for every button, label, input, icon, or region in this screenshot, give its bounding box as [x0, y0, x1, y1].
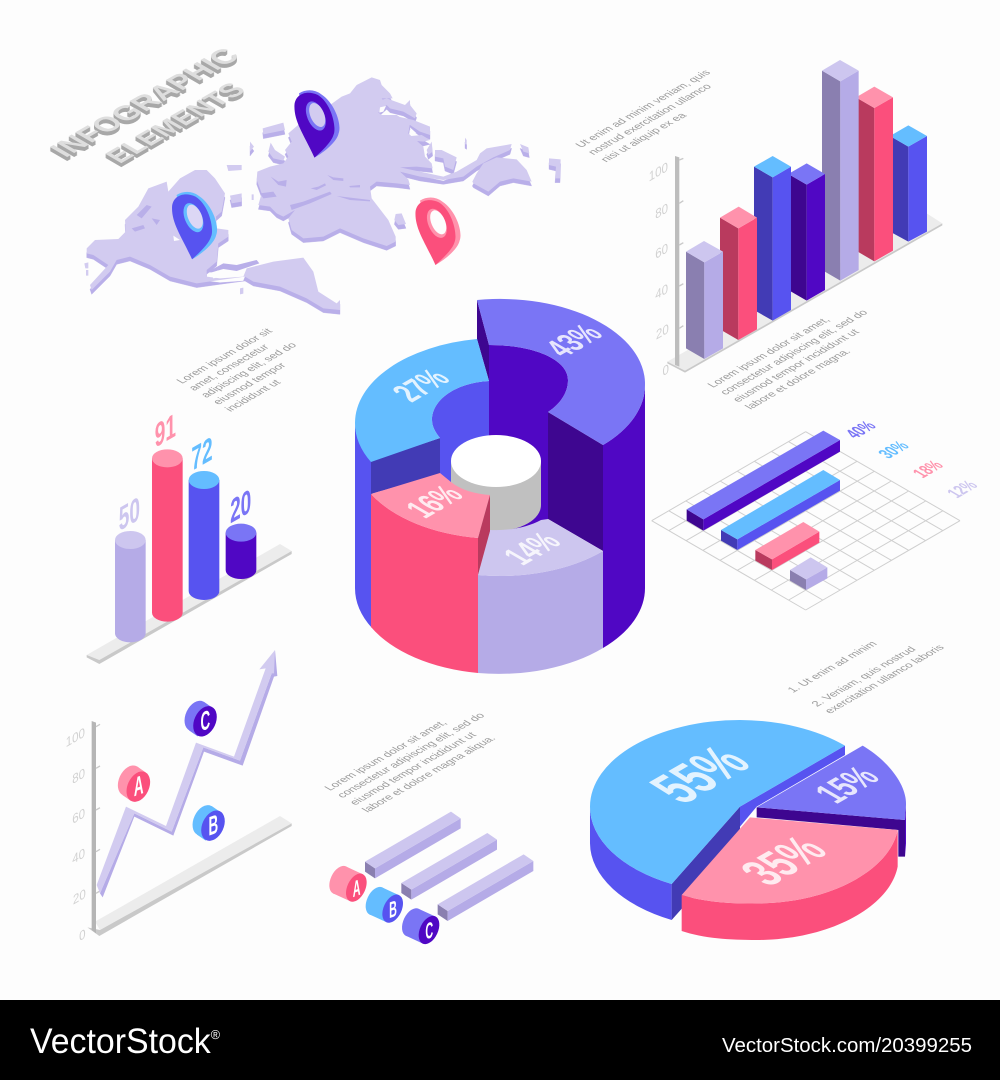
pin: red: [415, 198, 460, 265]
legend cylinder C: C: [425, 917, 433, 945]
lavender wall: [478, 551, 603, 674]
notch wedge: [477, 300, 489, 381]
label 30%: 30%: [874, 438, 914, 462]
text block: left: amet, consectetur: [186, 343, 273, 393]
blue segment top: [355, 339, 489, 462]
red segment top: [682, 817, 898, 903]
text block: top right: Ut enim ad minim veniam, quis: [573, 68, 714, 150]
inner wall dark: [548, 412, 603, 551]
chart floor: [667, 213, 942, 373]
red wall: [682, 830, 898, 940]
panel: line arrow chart: [66, 650, 533, 947]
y axis: [92, 721, 100, 933]
text block: under column chart: labore et dolore magna.: [743, 347, 854, 411]
title line 1: INFOGRAPHIC: [44, 44, 247, 162]
outer wall purple: [603, 385, 645, 648]
bar 12%: [790, 557, 827, 590]
center cylinder: [451, 435, 541, 531]
label 55%: 55%: [636, 738, 765, 812]
floor: [87, 816, 292, 936]
coastal gap: [379, 106, 417, 133]
y axis labels: [649, 159, 669, 379]
grid: [652, 432, 960, 610]
text block: under column chart: Lorem ipsum dolor sit amet,: [705, 316, 833, 390]
bar 2 red: [720, 207, 757, 340]
legend cylinder B: [362, 884, 407, 926]
bar 6 red: [856, 87, 893, 261]
y axis labels: 100: [649, 159, 668, 185]
text block: numbered list: 1. Ut enim ad minim: [785, 640, 880, 695]
bar 1 lavender: [686, 241, 723, 359]
bar 3 blue: [754, 156, 791, 321]
label 43%: 43%: [538, 320, 612, 362]
label 27%: 27%: [385, 364, 459, 407]
bar 40%: [687, 431, 840, 531]
cylinder 72: [189, 471, 219, 600]
text block: under column chart: consectetur adipiscing elit, sed do: [718, 308, 871, 397]
footer logo: VectorStock: [30, 1022, 217, 1061]
americas land: [84, 165, 340, 310]
caribbean strip: [132, 205, 259, 272]
arrow face: [97, 650, 275, 893]
floor: [87, 544, 292, 664]
lavender segment top: [478, 519, 603, 576]
text block: top right: nisi ut aliquip ex ea: [598, 111, 690, 164]
panel: world map: [84, 77, 561, 314]
y axis labels: 20: [73, 885, 86, 908]
bar 18%: [755, 522, 819, 570]
legend bar A: [365, 812, 461, 878]
Americas: [84, 165, 340, 314]
Eurasia, Africa and Oceania: [250, 77, 561, 250]
marker B: B: [208, 809, 218, 842]
bar 30%: [721, 470, 840, 550]
purple segment top: [757, 746, 906, 820]
y axis labels: 0: [79, 926, 86, 944]
cylinder 50: [115, 531, 146, 642]
map pins: [172, 90, 460, 265]
blue cut wall right: [740, 746, 845, 827]
dark wall under blue: [371, 438, 440, 494]
cylinder 91: [152, 449, 183, 622]
label 40%: 40%: [841, 418, 881, 442]
label 12%: 12%: [943, 478, 983, 501]
pin: blue: [172, 192, 217, 259]
y axis labels: 80: [72, 765, 85, 787]
text block: left: eiusmod tempor: [211, 361, 289, 407]
text block: lower middle: labore et dolore magna aliqua.: [360, 734, 499, 814]
arrow side: [100, 650, 277, 897]
panel: isometric column chart: [649, 60, 942, 379]
label 72: 72: [191, 428, 213, 478]
legend cylinder A: [325, 863, 371, 905]
y axis labels: 60: [72, 805, 85, 827]
panel: cylinder chart: [87, 405, 292, 664]
panel: grid bar chart: [652, 418, 983, 610]
pink segment top: [371, 473, 490, 538]
text block: numbered list: exercitation ullamco laboris: [822, 643, 948, 716]
text block: left: incididunt ut: [223, 378, 284, 414]
legend cylinder B: B: [389, 895, 397, 923]
americas extrusion: [87, 174, 340, 314]
y axis labels: 40: [655, 280, 668, 303]
y axis labels: [66, 724, 86, 944]
legend bar B: [401, 833, 497, 900]
label 14%: 14%: [496, 528, 570, 570]
eastern hemisphere extrusion: [250, 82, 561, 250]
y axis labels: 40: [72, 845, 85, 867]
inner wall blue: [432, 381, 489, 500]
bar 5 lavender: [822, 60, 859, 281]
panel: exploded pie chart: [590, 720, 906, 940]
pin: purple: [294, 90, 339, 158]
label 20: 20: [230, 481, 251, 531]
label 35%: 35%: [727, 828, 840, 893]
y axis: [675, 156, 683, 367]
y axis labels: 0: [662, 361, 669, 379]
purple segment top: [477, 299, 645, 445]
eastern hemisphere land: [250, 77, 561, 246]
marker C: [180, 697, 221, 740]
blue segment top: [590, 720, 845, 884]
outer wall blue: [355, 423, 372, 628]
blue wall: [590, 807, 672, 920]
marker B: [188, 801, 229, 845]
panel: donut chart: [355, 299, 645, 674]
bar 7 blue: [890, 125, 927, 242]
text block: lower middle: Lorem ipsum dolor sit amet,: [322, 719, 450, 793]
cylinder 20: [226, 524, 256, 579]
text block: under column chart: eiusmod tempor incididunt ut: [730, 328, 862, 404]
caribbean gap: [173, 236, 221, 278]
label 18%: 18%: [908, 458, 948, 481]
text block: lower middle: eiusmod tempor incididunt ut: [347, 731, 479, 807]
text block: top right: nostrud exercitation ullamco: [586, 82, 715, 157]
text block: lower middle: consectetur adipiscing elit, sed do: [335, 711, 488, 800]
bar 4 purple: [788, 163, 825, 301]
red wall: [371, 494, 478, 673]
footer band: [0, 1000, 1000, 1080]
title: infographic elements: [44, 44, 252, 168]
legend bar C: [438, 854, 533, 921]
y axis labels: 60: [655, 240, 668, 262]
footer url: VectorStock.com/20399255: [722, 1035, 972, 1057]
label 15%: 15%: [805, 761, 889, 809]
label 91: 91: [155, 405, 176, 455]
y axis labels: 80: [655, 200, 668, 222]
text block: left: adipiscing elit, sed do: [198, 341, 300, 400]
purple walls: [757, 805, 906, 857]
legend cylinder C: [398, 905, 443, 947]
inland seas: [260, 175, 370, 210]
marker C: C: [200, 704, 210, 738]
label 50: 50: [119, 488, 140, 538]
text block: numbered list: 2. Veniam, quis nostrud: [809, 645, 919, 709]
y axis labels: 100: [66, 724, 85, 750]
marker A: [113, 762, 155, 806]
footer logo: ®: [211, 1027, 220, 1042]
title line 2: ELEMENTS: [99, 78, 252, 167]
marker A: A: [134, 769, 144, 803]
text block: left: Lorem ipsum dolor sit: [174, 327, 276, 386]
label 16%: 16%: [398, 481, 472, 523]
legend cylinder A: A: [353, 874, 361, 902]
inner wall purple: [489, 345, 568, 535]
y axis labels: 20: [656, 320, 669, 343]
red inner wedge: [478, 495, 490, 575]
blue cut wall left: [672, 807, 740, 920]
